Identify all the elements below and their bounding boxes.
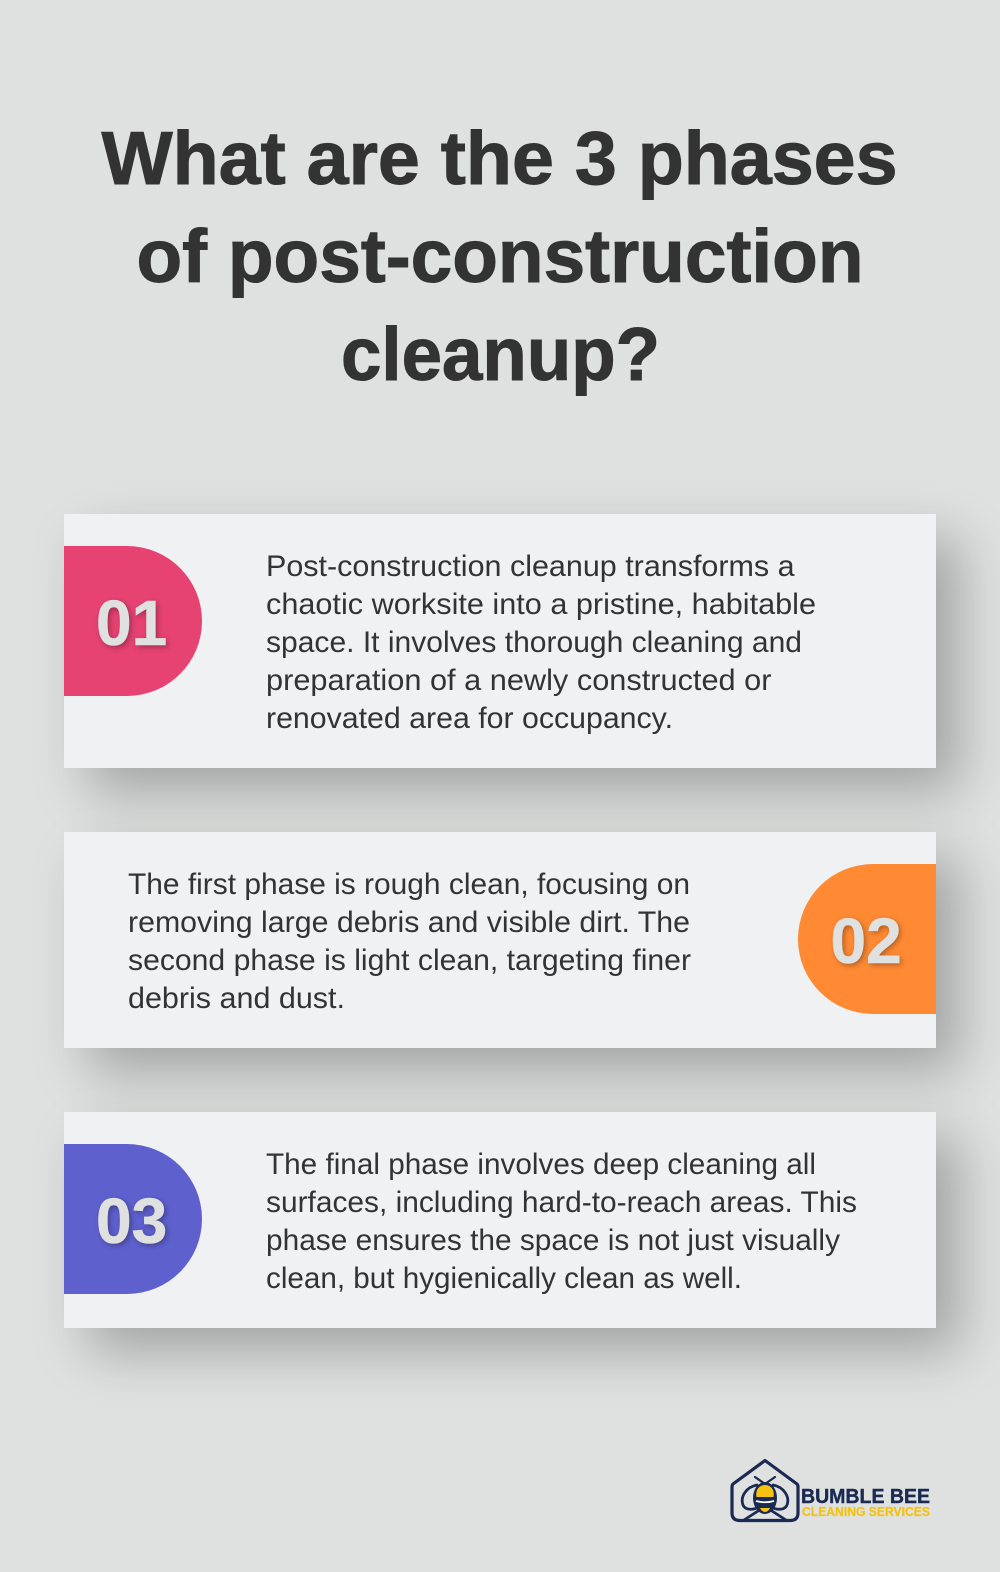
badge: 01	[64, 546, 202, 696]
badge: 03	[64, 1144, 202, 1294]
number 01: 01	[96, 587, 167, 659]
text: step 02 description: The first phase is rough clean, focusing on	[128, 868, 690, 901]
badge: 02	[798, 864, 936, 1014]
title: cleanup?	[341, 312, 660, 396]
text: step 03 description: surfaces, including hard-to-reach areas. This	[266, 1186, 857, 1219]
text: step 01 description: renovated area for occupancy.	[266, 702, 673, 735]
text: step 01 description: space. It involves thorough cleaning and	[266, 626, 802, 659]
icon: house outline with bee	[732, 1460, 798, 1520]
text: step 02 description: second phase is light clean, targeting finer	[128, 944, 691, 977]
title: of post-construction	[136, 214, 864, 298]
text: step 03 description: phase ensures the space is not just visually	[266, 1224, 840, 1257]
text: step 03 description: clean, but hygienically clean as well.	[266, 1262, 742, 1295]
logo text	[801, 1486, 930, 1519]
number 02: 02	[830, 905, 902, 977]
panel: step 01	[64, 514, 936, 768]
panel: step 02	[64, 832, 936, 1048]
text: step 01 description: preparation of a newly constructed or	[266, 664, 772, 697]
text: step 02 description: debris and dust.	[128, 982, 345, 1015]
text: step 01 description	[266, 550, 816, 735]
text: step 01 description: chaotic worksite into a pristine, habitable	[266, 588, 816, 621]
logo text: CLEANING SERVICES	[802, 1504, 930, 1519]
text: step 03 description: The final phase involves deep cleaning all	[266, 1148, 816, 1181]
panel: step 03	[64, 1112, 936, 1328]
text: step 01 description: Post-construction cleanup transforms a	[266, 550, 795, 583]
title: What are the 3 phases	[102, 116, 898, 200]
text: step 02 description: removing large debris and visible dirt. The	[128, 906, 690, 939]
logo text: BUMBLE BEE	[801, 1486, 930, 1508]
text: step 02 description	[128, 868, 691, 1015]
number 03: 03	[96, 1185, 167, 1257]
title	[101, 116, 898, 396]
